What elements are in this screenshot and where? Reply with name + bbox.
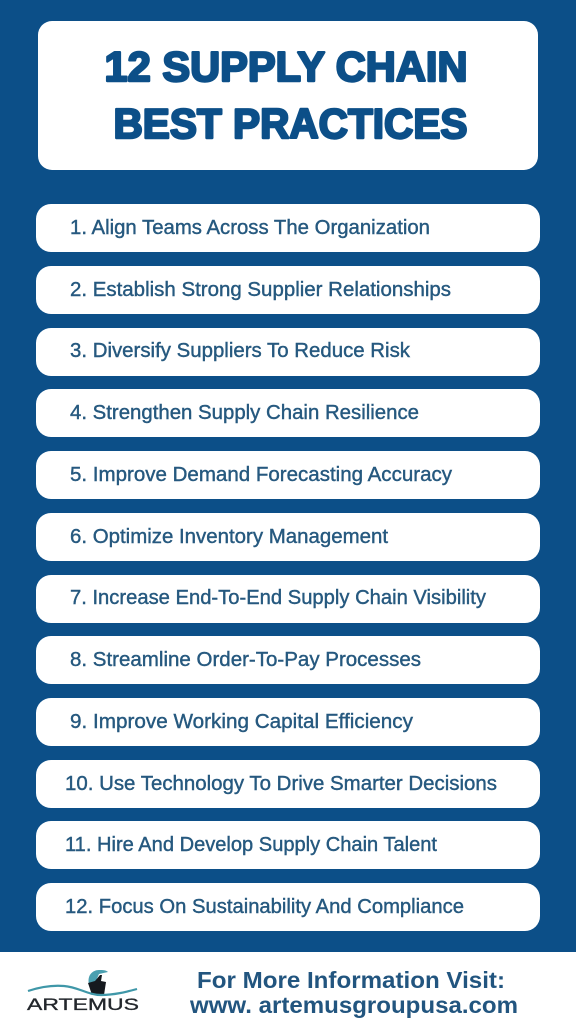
panel: practice 8 [36, 636, 540, 684]
panel: practice 2: 2. Establish Strong Supplier Relationships [70, 279, 451, 301]
panel: practice 12: 12. Focus On Sustainability And Compliance [65, 896, 464, 918]
panel: title [38, 21, 538, 170]
text: footer call to action: For More Information Visit: [197, 967, 505, 993]
panel: practice 2 [36, 266, 540, 314]
panel: practice 11 [36, 821, 540, 869]
panel: practice 7 [36, 575, 540, 623]
text: footer website: www. artemusgroupusa.com [189, 992, 518, 1018]
panel: practice 9 [36, 698, 540, 746]
panel: practice 5: 5. Improve Demand Forecasting Accuracy [70, 464, 452, 486]
panel: practice 12 [36, 883, 540, 931]
panel: practice 10: 10. Use Technology To Drive Smarter Decisions [65, 773, 497, 795]
panel: practice 10 [36, 760, 540, 808]
panel: practice 3: 3. Diversify Suppliers To Reduce Risk [70, 340, 411, 362]
panel: practice 7: 7. Increase End-To-End Supply Chain Visibility [70, 587, 486, 609]
icon: Artemus ship logo [27, 970, 139, 1014]
panel: practice 1 [36, 204, 540, 252]
panel: footer [0, 952, 576, 1024]
heading: title line 2: BEST PRACTICES [114, 100, 468, 147]
panel: practice 6: 6. Optimize Inventory Management [70, 526, 388, 548]
panel: practice 4: 4. Strengthen Supply Chain Resilience [70, 402, 419, 424]
panel: practice 1: 1. Align Teams Across The Organization [70, 217, 430, 239]
panel: practice 4 [36, 389, 540, 437]
panel: practice 8: 8. Streamline Order-To-Pay Processes [70, 649, 421, 671]
panel: practice 3 [36, 328, 540, 376]
text: Artemus wordmark: ARTEMUS [27, 995, 139, 1014]
heading: title line 1: 12 SUPPLY CHAIN [104, 43, 468, 90]
panel: practice 11: 11. Hire And Develop Supply Chain Talent [65, 834, 437, 856]
panel: practice 6 [36, 513, 540, 561]
panel: practice 9: 9. Improve Working Capital Efficiency [70, 711, 413, 733]
panel: practice 5 [36, 451, 540, 499]
